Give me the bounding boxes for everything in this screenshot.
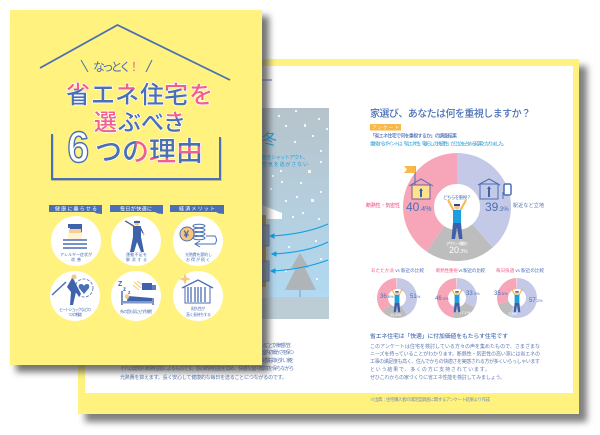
title kicker [81, 58, 152, 75]
icon circle: allergy: 改善 [71, 256, 81, 263]
badge: health [49, 205, 102, 214]
badge: economy [170, 205, 224, 214]
photo: snowy house: 空気を逃がさない [262, 161, 308, 168]
left page body text: 室内の暖かさを保つ [262, 349, 294, 356]
center label: どちらを重視？ [443, 194, 471, 201]
icon circle: durable house: 耐久性が [191, 305, 205, 312]
small donut 3 title: 毎日快適 vs 駅近の比較 [496, 267, 544, 274]
small donut 1: 51% [410, 294, 421, 300]
small donut 1 title: あたたか派 vs 駅近の比較 [371, 267, 424, 274]
body text: lower section: このアンケートは住宅を検討している方々の声を集めたもので、さまざまな [370, 343, 540, 350]
heading: lower section: 省エネ住宅は「快適」に付加価値をもたらす住宅です [370, 331, 508, 340]
person [448, 200, 466, 239]
panel: three small donuts [371, 267, 544, 317]
small donut 1: 36.6% [380, 294, 394, 300]
tag: survey: アンケート [372, 124, 399, 131]
left page body text: 結露も抑えられ、家を [262, 357, 294, 364]
small donut 3: 57.2% [529, 298, 543, 304]
small donut 2 [435, 284, 480, 315]
body text: lower section [370, 343, 540, 381]
frame bracket [52, 134, 220, 180]
footer note: ※出典：住宅購入者の満足度調査に関するアンケート結果より作成 [370, 396, 490, 403]
title kicker: なっとく！ [93, 58, 140, 75]
small donut 3: 35.5% [494, 291, 508, 297]
small donut 3: 7.3% [508, 311, 518, 316]
badge: comfort: 毎日が快適に [120, 206, 152, 212]
survey summary: 重視するポイントは「省エネ性」「暮らしの快適性」が上位を占める結果となりました。 [370, 140, 507, 148]
body text: lower section: 工事の満足度も高く、住んでからの快適さを実感される方が多くいらっしゃいます [370, 358, 540, 365]
title: の [122, 130, 149, 169]
icon circle: quiet sleep: Z [118, 281, 123, 288]
left page body text: それは建物の断熱性能によるものです。窓の断熱性能を高め、快適な室内環境を保ちながら [120, 365, 294, 372]
icon circle: heart health [50, 271, 100, 321]
shadow: cover [16, 16, 269, 372]
label: 40.4%: 40.4% [406, 200, 431, 214]
photo heading: 冬 [262, 128, 277, 149]
icon circle: durable house [173, 271, 223, 321]
icon circle: quiet sleep: 外の音も気にせず快眠 [120, 308, 152, 315]
small donut 2: 33.3% [466, 291, 480, 297]
label: left segment: 断熱性・気密性 [366, 202, 400, 209]
title: ぶ [118, 103, 141, 137]
panel: cover [10, 10, 262, 365]
icon circle: quiet sleep: z [123, 287, 126, 293]
photo: snowy house [262, 108, 329, 319]
survey question: 「省エネ住宅で何を重視するか」の調査結果 [370, 132, 457, 140]
title: 省 [66, 75, 90, 110]
title: を [189, 75, 213, 110]
tree [285, 253, 316, 297]
icon circle: yen coins [173, 216, 223, 266]
title: 宅 [164, 75, 188, 110]
label: right segment: 駅近など立地 [513, 202, 544, 209]
title: 理 [149, 130, 176, 169]
house [262, 205, 282, 298]
icon circle: quiet sleep: z [128, 290, 131, 296]
small donut 2 title: 断熱性重視 vs 駅近の比較 [436, 267, 486, 274]
left page body text: 光熱費を抑えます。長く安心して健康的な毎日を送ることにつながるのです。 [120, 374, 287, 381]
icon circle: allergy [51, 216, 101, 266]
shadow: inside spread [85, 66, 587, 422]
small donut 3 [494, 284, 543, 316]
label: 39.3%: 39.3% [485, 200, 509, 214]
title: ネ [115, 75, 139, 110]
title: エ [91, 75, 115, 110]
icon circle: yen coins: 光熱費を節約し [185, 251, 212, 258]
icon circle: active person: 解消する [126, 256, 147, 263]
small donut 1: 11.4% [390, 312, 401, 317]
left page body text [120, 342, 294, 381]
icon circle: quiet sleep [111, 271, 161, 321]
icon circle: active person [111, 216, 161, 266]
label: gray segment: デザイン・間取り [446, 240, 468, 247]
small donut 2: 17.1% [459, 310, 471, 315]
title: べ [141, 103, 164, 137]
badge: comfort [110, 205, 163, 214]
title numeral 6: 6 [68, 122, 89, 172]
snowflakes [270, 110, 328, 280]
icon circle: yen coins: ¥ [184, 230, 190, 240]
title: き [163, 103, 186, 137]
icon: flag house [404, 166, 433, 199]
icon circle: active person: 運動不足を [126, 251, 147, 258]
icon: station house [478, 179, 511, 199]
icon circle: yen coins: お得が続く [186, 256, 210, 263]
title: つ [95, 130, 122, 169]
left page body text: ることで冷気を防ぎ、 [262, 342, 294, 349]
donut chart: main [404, 166, 511, 255]
body text: lower section: という結果で、多くの方に支持されています。 [370, 366, 490, 373]
body text: lower section: ぜひこれからの家づくりに省エネ性能を検討してみましょう。 [370, 374, 505, 381]
left page header fragment [262, 80, 272, 81]
badge: health: 健康に暮らせる [55, 206, 97, 212]
arrows: cold air [270, 224, 328, 273]
title: 選 [94, 103, 117, 137]
icon circle: allergy: アレルギー症状が [60, 251, 92, 258]
small donut 1 [380, 284, 421, 317]
icon: house roof line [40, 25, 230, 80]
photo caption: 気をシャットアウト、 [262, 154, 308, 161]
icon circle: heart health: リスク軽減 [68, 311, 82, 318]
icon circle: heart health: ヒートショックなどの [59, 306, 91, 313]
icon circle: durable house: 高く長持ちする [186, 311, 211, 318]
label: 20.3%: 20.3% [449, 245, 468, 255]
title: 由 [176, 130, 203, 169]
title [66, 75, 213, 169]
badge: economy: 経済メリット [179, 206, 215, 212]
title: 住 [140, 75, 164, 110]
small donut 2: 46.3% [435, 296, 449, 302]
body text: lower section: ニーズを持っていることがわかります。断熱性・気密性の高い家には省エネの [370, 350, 540, 358]
heading: main question: 家選び、あなたは何を重視しますか？ [370, 105, 531, 120]
